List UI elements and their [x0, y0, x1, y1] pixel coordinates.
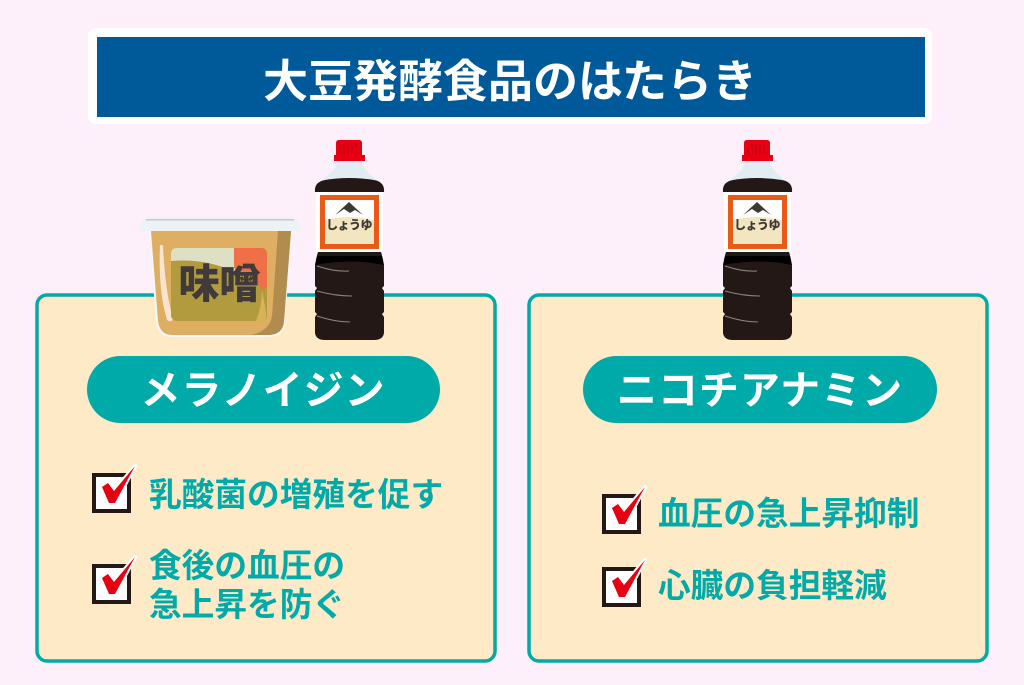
heading pill: melanoidin: メラノイジン — [140, 369, 386, 413]
icon: checkbox heart — [604, 560, 645, 605]
panel: melanoidin background — [37, 295, 495, 661]
text: blood pressure: 血圧の急上昇抑制 — [658, 495, 920, 532]
icon: soy sauce bottle right: しょうゆ — [734, 218, 780, 232]
heading pill: nicotianamine: ニコチアナミン — [617, 369, 903, 413]
icon: soy sauce bottle left: しょうゆ — [326, 218, 372, 232]
icon: checkbox blood sugar — [94, 557, 135, 602]
text: lactic acid: 乳酸菌の増殖を促す — [149, 476, 443, 513]
icon: miso container: 味噌 — [178, 250, 260, 310]
icon: miso container — [140, 217, 300, 337]
title banner — [88, 28, 932, 124]
title banner: 大豆発酵食品のはたらき — [263, 56, 757, 107]
text: heart: 心臓の負担軽減 — [658, 567, 887, 604]
text: blood sugar: 急上昇を防ぐ — [149, 586, 345, 623]
panel: nicotianamine background — [529, 295, 987, 661]
icon: checkbox lactic acid — [94, 466, 135, 511]
heading pill: nicotianamine — [583, 356, 937, 423]
heading pill: melanoidin — [87, 356, 440, 423]
text: blood sugar: 食後の血圧の — [149, 547, 345, 584]
text: blood sugar — [149, 547, 345, 623]
icon: checkbox blood pressure — [604, 487, 645, 532]
icon: soy sauce bottle right — [723, 140, 792, 340]
icon: soy sauce bottle left — [315, 140, 384, 340]
